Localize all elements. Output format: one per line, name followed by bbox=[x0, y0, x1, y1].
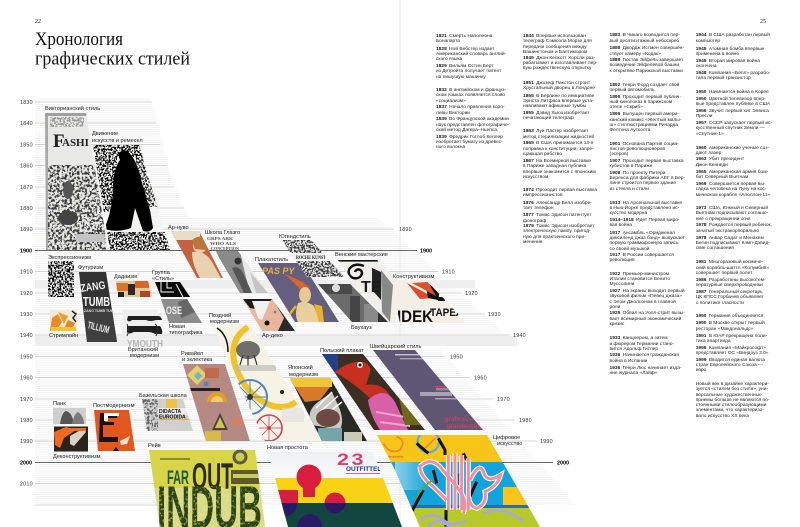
timeline grid lines bbox=[35, 102, 553, 505]
text column: 1844–1879 events: тает телефон bbox=[523, 206, 554, 211]
year labels: right ends of bands: 1950 bbox=[450, 354, 463, 360]
text column: 1844–1879 events: 1855 В Берлине по инициативе bbox=[523, 94, 594, 99]
text column: 1844–1879 events: телеграф Сэмюэла Морзе для bbox=[523, 39, 592, 44]
text column: 1944–1999 events and closing note: стран Европейского Союза — bbox=[696, 363, 763, 368]
style: Art Deco bbox=[242, 299, 296, 339]
year labels: left axis: 1830 bbox=[20, 100, 33, 106]
text column: 1844–1879 events: 1874 Проходит первая выставка bbox=[523, 188, 597, 193]
text column: 1883–1936 events: 1901 Основана Партия социа- bbox=[610, 142, 679, 147]
year labels: right ends of bands: 1930 bbox=[488, 312, 501, 318]
style: Late Modernism bbox=[209, 312, 325, 441]
text column: 1821–1839 events bbox=[436, 34, 510, 150]
text column: 1883–1936 events: 1908 По проекту Питера bbox=[610, 171, 666, 176]
year labels: left axis: 1840 bbox=[20, 121, 33, 127]
text column: 1944–1999 events and closing note: 1986 Разработаны высокотем- bbox=[696, 278, 766, 283]
text column: 1944–1999 events and closing note: зуется «стилем без стиля», уни- bbox=[696, 387, 768, 392]
text column: 1883–1936 events: 1883 В Чикаго возводится пер- bbox=[610, 33, 680, 38]
year labels: left axis: 1850 bbox=[20, 142, 33, 148]
year labels: left axis: 1990 bbox=[20, 439, 33, 445]
style: British Modernism bbox=[122, 310, 163, 359]
style: Futurism: Футуризм bbox=[78, 265, 103, 271]
text column: 1844–1879 events: 1876 Александр Белл изобре- bbox=[523, 201, 592, 206]
text column: 1844–1879 events: Эрнста Литфаса впервые уста- bbox=[523, 99, 594, 104]
text column: 1844–1879 events bbox=[523, 34, 598, 245]
text column: 1883–1936 events: первую граммофонную запись bbox=[610, 241, 679, 246]
style: Victorian: Викторианский стиль bbox=[45, 105, 100, 112]
text column: 1883–1936 events: первый автомобиль bbox=[610, 88, 654, 93]
text column: 1821–1839 events: изобретает бумагу из древес- bbox=[436, 140, 503, 145]
text column: 1944–1999 events and closing note: окончена bbox=[696, 64, 717, 69]
style: Swiss Style bbox=[370, 343, 487, 430]
text column: 1944–1999 events and closing note: ский корабль-шаттл «Колумбия» bbox=[696, 266, 769, 271]
style: Vienna Secession bbox=[335, 252, 401, 322]
style: Digital Art: искусство bbox=[497, 441, 522, 447]
text column: 1944–1999 events and closing note: 1948 Компания «Белл» разрабо- bbox=[696, 71, 770, 76]
style: Expressionism: Экспрессионизм bbox=[48, 255, 91, 261]
style: Digital Art: Цифровое bbox=[493, 435, 520, 441]
text column: 1883–1936 events: звуковой фильм «Певец джаза» bbox=[610, 294, 682, 299]
text column: 1944–1999 events and closing note: 1995 Компания «Майкрософт» bbox=[696, 346, 766, 351]
year labels: right ends of bands: 1890 bbox=[399, 227, 412, 233]
text column: 1821–1839 events: 1828 Ной Вебстер издает bbox=[436, 47, 494, 52]
style: Basel School: DIDACTA bbox=[159, 409, 182, 415]
style: Glasgow School: GRPS ARK bbox=[207, 236, 234, 241]
text column: 1883–1936 events: листов-революционеров bbox=[610, 147, 665, 152]
style: New Typography: Новая bbox=[169, 324, 185, 330]
style: De Stijl group bbox=[152, 270, 191, 297]
style: New Typography: OSE bbox=[166, 305, 182, 317]
style: Art Deco: Ар-деко bbox=[262, 333, 283, 339]
style: British Modernism: модернизм bbox=[130, 353, 159, 359]
text column: 1844–1879 events: Хрустальный дворец в Лондоне bbox=[523, 86, 595, 91]
text column: 1883–1936 events: с Элом Джолсоном в главной bbox=[610, 300, 676, 305]
style: Arts and Crafts: искусств и ремесел bbox=[92, 138, 143, 144]
text column: 1944–1999 events and closing note: вало искусство XX века bbox=[696, 414, 749, 419]
text column: 1883–1936 events: к открытию Парижской выставки bbox=[610, 69, 683, 74]
text column: 1944–1999 events and closing note: Джон Кеннеди bbox=[696, 163, 728, 168]
style: Late Modernism: Поздний bbox=[209, 312, 231, 319]
style: Victorian: ASHI bbox=[62, 137, 89, 149]
text column: 1944–1999 events and closing note: 1987 Генеральный секретарь bbox=[696, 290, 763, 295]
text column: 1883–1936 events: 1917 Ансамбль «Оридженал bbox=[610, 231, 675, 236]
text column: 1883–1936 events: лине строится первое здание bbox=[610, 181, 676, 186]
text column: 1883–1936 events: из стекла и стали bbox=[610, 187, 649, 192]
text column: 1883–1936 events: 1907 Проходит первая выставка bbox=[610, 159, 684, 164]
text column: 1883–1936 events: 1936 Генри Люс начинает изда- bbox=[610, 366, 682, 371]
title: графических стилей bbox=[35, 50, 190, 70]
style: Swiss Style: graficas — bbox=[445, 417, 476, 423]
text column: 1844–1879 events: щающая рабство bbox=[523, 152, 562, 157]
style: New Simplicity: Новая простота bbox=[267, 445, 309, 451]
style: Streamline: Стримлайн bbox=[49, 332, 78, 339]
text column: 1883–1936 events: 1913 На Арсенальной выставке bbox=[610, 201, 682, 206]
year labels: left axis: 2000 bbox=[20, 460, 32, 466]
text column: 1883–1936 events: вый десятиэтажный небоскреб bbox=[610, 39, 679, 44]
text column: 1844–1879 events: передачи сообщения между bbox=[523, 45, 587, 50]
text column: 1883–1936 events: вая война bbox=[610, 223, 632, 228]
year labels: left axis: 1900 bbox=[20, 248, 32, 254]
text column: 1821–1839 events: 1837 Начало правления коро- bbox=[436, 105, 505, 110]
year labels: left axis: 1880 bbox=[20, 206, 33, 212]
style: New Typography bbox=[160, 299, 204, 336]
text column: 1844–1879 events: 1879 Томас Эдисон изобретает bbox=[523, 224, 594, 229]
text column: 1844–1879 events: Вашингтоном и Балтимором bbox=[523, 50, 587, 55]
text column: 1944–1999 events and closing note: совершает первый полет bbox=[696, 271, 752, 276]
style: Plakatstil: PAS PY bbox=[262, 266, 295, 276]
text column: 1883–1936 events: Муссолини bbox=[610, 282, 634, 287]
title bbox=[35, 30, 190, 70]
text column: 1883–1936 events: Беренса для фабрики АЕГ в Бер- bbox=[610, 176, 685, 181]
style: Streamline bbox=[49, 310, 78, 339]
style: Revival and Eclectic: и эклектика bbox=[182, 357, 213, 363]
text column: 1821–1839 events: 1839 Фредрик Готлоб Келлер bbox=[436, 135, 503, 140]
text column: 1944–1999 events and closing note: Новый век в дизайне характери- bbox=[696, 382, 769, 387]
text column: 1883–1936 events: 1927 На экраны выходит первый bbox=[610, 289, 685, 294]
style: Constructivism bbox=[392, 274, 466, 326]
text column: 1883–1936 events: 1896 Выпущен первый амери- bbox=[610, 112, 679, 117]
text column: 1844–1879 events: 1855 Дэвид Хьюз изобретает bbox=[523, 111, 589, 116]
style: Jugendstil: Югендстиль bbox=[279, 234, 311, 240]
style: Plakatstil bbox=[255, 257, 345, 322]
style: Art Nouveau bbox=[168, 225, 225, 278]
text column: 1821–1839 events: на пишущую машинку bbox=[436, 75, 486, 80]
year labels: left axis: 1950 bbox=[20, 354, 33, 360]
text column: 1883–1936 events: Фелтона Аутколта bbox=[610, 128, 650, 133]
style: Swiss Style: grandeslibros bbox=[447, 424, 487, 430]
text column: 1883–1936 events: отеле «Скриб» bbox=[610, 105, 643, 110]
text column: 1844–1879 events: 1867 На Всемирной выставке bbox=[523, 159, 591, 164]
year labels: left axis: 1980 bbox=[20, 418, 33, 424]
style: Japanese Modernism: Японский bbox=[288, 364, 313, 371]
title: Хронология bbox=[35, 30, 123, 50]
style: Bauhaus bbox=[316, 284, 390, 331]
style: Arts and Crafts bbox=[90, 131, 175, 250]
text column: 1944–1999 events and closing note: 1957 СССР запускает первый ис- bbox=[696, 121, 772, 126]
style: Victorian: F bbox=[53, 131, 65, 152]
style: Expressionism bbox=[48, 255, 91, 297]
text column: 1883–1936 events: кусство модерна bbox=[610, 211, 647, 216]
style: Rave: FAR bbox=[167, 468, 189, 489]
text column: 1944–1999 events and closing note: 1945 Вторая мировая война bbox=[696, 59, 760, 64]
text column: 1883–1936 events: ш» с иллюстрациями Ричарда bbox=[610, 123, 678, 128]
text column: 1883–1936 events: ный кинопоказ в парижском bbox=[610, 100, 672, 105]
text column: 1844–1879 events: рабатывает и изготавливает пер- bbox=[523, 61, 598, 66]
text column: 1883–1936 events: война в Испании bbox=[610, 359, 647, 364]
text column: 1821–1839 events: ского языка bbox=[436, 57, 462, 62]
page number left: 22 bbox=[35, 19, 41, 25]
style: Jugendstil bbox=[279, 234, 346, 277]
text column: 1844–1879 events: вую рождественскую открытку bbox=[523, 66, 591, 71]
text column: 1844–1879 events: в Париже западная публика bbox=[523, 164, 586, 169]
style: Revival and Eclectic bbox=[181, 350, 252, 441]
style: Dadaism: Дадаизм bbox=[114, 274, 137, 280]
year labels: left axis: 2010 bbox=[20, 482, 33, 488]
text column: 1944–1999 events and closing note: тала первый транзистор bbox=[696, 76, 751, 81]
text column: 1844–1879 events: 1865 В США принимается 13-я bbox=[523, 141, 593, 146]
text column: 1883–1936 events bbox=[610, 33, 685, 376]
text column: 1821–1839 events: 1832 В английском и француз- bbox=[436, 88, 506, 93]
text column: 1944–1999 events and closing note: Бегин подписывают Кэмп-Дэвид- bbox=[696, 241, 770, 246]
year labels: right ends of bands: 2000 bbox=[557, 460, 569, 466]
year labels: left axis: 1860 bbox=[20, 164, 33, 170]
text column: 1944–1999 events and closing note: ние о прекращении огня bbox=[696, 217, 750, 222]
text column: 1944–1999 events and closing note: 1945 Атомная бомба впервые bbox=[696, 47, 764, 52]
style: New Simplicity: OUTFITTED bbox=[346, 467, 383, 473]
text column: 1844–1879 events: 1863 Луи Пастер изобретает bbox=[523, 129, 589, 134]
text column: 1944–1999 events and closing note: представляет ОС «Виндоуз 3.0» bbox=[696, 351, 769, 356]
year labels: right ends of bands: 1920 bbox=[465, 291, 478, 297]
text column: 1844–1879 events: навливают афишные тумбы bbox=[523, 104, 586, 109]
style: Futurism: TUMB bbox=[83, 294, 110, 309]
style: Dadaism bbox=[114, 274, 153, 297]
style: Polish Poster bbox=[320, 347, 428, 430]
text column: 1844–1879 events: электрическую лампу, пригод- bbox=[523, 229, 591, 234]
text column: 1821–1839 events: наук представлен фотографиче- bbox=[436, 123, 509, 128]
year labels: left axis: 1970 bbox=[20, 397, 33, 403]
year labels: right ends of bands: 1900 bbox=[420, 248, 432, 254]
style: Rave: OUT bbox=[192, 456, 233, 497]
style: Postmodernism: Постмодернизм bbox=[93, 403, 135, 409]
text column: 1821–1839 events: Американский словарь англий- bbox=[436, 52, 506, 57]
text column: 1883–1936 events: 1888 Джордж Истмен совершен- bbox=[610, 46, 684, 51]
text column: 1944–1999 events and closing note: Пресли bbox=[696, 114, 713, 119]
text column: 1944–1999 events and closing note: 1944 В США разработан первый bbox=[696, 33, 770, 38]
year labels: left axis: 1910 bbox=[20, 270, 33, 276]
year labels: left axis: 1890 bbox=[20, 227, 33, 233]
text column: 1883–1936 events: 1892 Генри Форд создает свой bbox=[610, 83, 679, 88]
text column: 1844–1879 events: 1851 Джозеф Пакстон строит bbox=[523, 81, 590, 86]
text column: 1844–1879 events: 1877 Томас Эдисон патентует bbox=[523, 213, 591, 218]
style: Futurism bbox=[78, 265, 120, 342]
style: Constructivism: Конструктивизм bbox=[393, 274, 435, 280]
text column: 1821–1839 events: левы Виктории bbox=[436, 111, 470, 116]
style: Vienna Secession: TE bbox=[361, 279, 382, 296]
style: Glasgow School bbox=[205, 230, 272, 293]
year labels: left axis: 1960 bbox=[20, 376, 33, 382]
style: Constructivism: ТАРЕЛ bbox=[430, 307, 463, 319]
style: Futurism: TILLIUM bbox=[86, 320, 110, 336]
text column: 1821–1839 events: 1821 Смерть Наполеона bbox=[436, 34, 492, 39]
text column: 1944–1999 events and closing note: 1990 Германия объединяется bbox=[696, 314, 763, 319]
text column: 1883–1936 events: диксиленд джаз бэнд» выпускает bbox=[610, 236, 685, 241]
text column: 1821–1839 events: Бонапарта bbox=[436, 39, 460, 44]
text column: 1883–1936 events: 1936 Начинается гражданская bbox=[610, 353, 679, 358]
style: British Modernism: YMOUTH bbox=[127, 339, 163, 350]
text column: 1883–1936 events: возведение Эйфелевой башни bbox=[610, 63, 679, 68]
text column: 1944–1999 events and closing note: тика апартеида bbox=[696, 339, 731, 344]
text column: 1821–1839 events: из Детройта получает патент bbox=[436, 69, 501, 74]
style: Art Nouveau: Ар-нуво bbox=[168, 225, 189, 231]
style: Rave bbox=[148, 442, 268, 527]
text column: 1883–1936 events: революция bbox=[610, 258, 635, 263]
text column: 1944–1999 events and closing note: 1991 В ЮАР прекращена поли- bbox=[696, 334, 767, 339]
style: Constructivism: IDEK bbox=[397, 307, 434, 326]
style: Futurism: ZANG bbox=[80, 280, 106, 295]
style: New Typography: типографика bbox=[169, 330, 203, 336]
text column: 1844–1879 events: импрессионистов bbox=[523, 193, 563, 198]
text column: 1883–1936 events: ствует камеру «Кодак» bbox=[610, 52, 661, 57]
style: New Simplicity bbox=[266, 445, 404, 527]
text column: 1944–1999 events and closing note: бит Северный Вьетнам bbox=[696, 175, 748, 180]
style: Victorian bbox=[45, 105, 110, 250]
text column: 1944–1999 events and closing note: садка человека на Луну на кос- bbox=[696, 187, 766, 192]
text column: 1944–1999 events and closing note: 1973 США, Южный и Северный bbox=[696, 206, 768, 211]
style: Glasgow School: WHO ALS bbox=[210, 241, 237, 246]
style: Punk: Панк bbox=[53, 401, 66, 407]
text column: 1944–1999 events and closing note: зачатый экстракорпорально bbox=[696, 229, 759, 234]
text column: 1844–1879 events: фонограф bbox=[523, 219, 546, 224]
style: Revival and Eclectic: Ривайвл bbox=[181, 350, 203, 357]
text column: 1883–1936 events: и фюрером Германии стано- bbox=[610, 342, 674, 347]
style: Glasgow School: CONCEPTION bbox=[211, 246, 240, 251]
year labels: right ends of bands: 1940 bbox=[513, 333, 526, 339]
text column: 1844–1879 events: печатающий телеграф bbox=[523, 116, 574, 121]
text column: 1883–1936 events: канский комикс «Желтый малы- bbox=[610, 118, 681, 123]
text column: 1944–1999 events and closing note: пературные сверхпроводники bbox=[696, 283, 763, 288]
style: Late Modernism: модернизм bbox=[210, 319, 239, 325]
text column: 1883–1936 events: 1889 Гюстав Эйфель завершает bbox=[610, 58, 683, 63]
text column: 1821–1839 events: ский метод Дагера–Ньепса. bbox=[436, 128, 498, 133]
style: New Simplicity: 23 bbox=[337, 450, 366, 469]
style: De Stijl group: «Стиль» bbox=[152, 276, 174, 282]
text column: 1844–1879 events: искусством bbox=[523, 175, 548, 180]
text column: 1944–1999 events and closing note: евро bbox=[696, 368, 706, 373]
year labels: right ends of bands bbox=[399, 227, 569, 466]
text column: 1944–1999 events and closing note: кусственный спутник Земли — bbox=[696, 126, 765, 131]
text column: 1944–1999 events and closing note: 1965 Американская армия бом- bbox=[696, 170, 768, 175]
text column: 1844–1879 events: ную для практического при- bbox=[523, 235, 586, 240]
text column: 1821–1839 events: 1839 Во Французской академии bbox=[436, 117, 509, 122]
style: Japanese Modernism: модернизм bbox=[289, 372, 318, 378]
text column: 1883–1936 events: в Нью-Йорке представлено ис- bbox=[610, 206, 679, 211]
style: Plakatstil: Плакатстиль bbox=[255, 257, 288, 263]
text column: 1944–1999 events and closing note: о политике гласности bbox=[696, 301, 744, 306]
style: Arts and Crafts: Движение bbox=[92, 131, 118, 137]
text column: 1944–1999 events and closing note: 1981 Многоразовый космиче- bbox=[696, 260, 763, 265]
text column: 1883–1936 events: ние журнала «Лайф» bbox=[610, 371, 657, 376]
year labels: right ends of bands: 1970 bbox=[497, 397, 510, 403]
text column: 1883–1936 events: 1922 Премьер-министром bbox=[610, 272, 669, 277]
text column: 1944–1999 events and closing note bbox=[696, 32, 772, 419]
style: De Stijl group: Группа bbox=[152, 270, 171, 276]
year labels: left axis: 1870 bbox=[20, 185, 33, 191]
style: Glasgow School: Школа Глазго bbox=[205, 230, 240, 236]
style: Basel School: Базельская школа bbox=[139, 393, 188, 399]
text column: 1821–1839 events: ском языках появляется слово bbox=[436, 93, 505, 98]
text column: 1883–1936 events: Италии становится Бенито bbox=[610, 277, 670, 282]
style: Rave: Рейв bbox=[148, 442, 161, 449]
text column: 1944–1999 events and closing note: 1969 Совершается первая вы- bbox=[696, 182, 765, 187]
text column: 1883–1936 events: 1933 Канцлером, а затем bbox=[610, 336, 668, 341]
style: Bauhaus: Баухауз bbox=[351, 325, 372, 331]
text column: 1944–1999 events and closing note: мическом корабле «Аполлон-11» bbox=[696, 193, 770, 198]
style: Basel School: EURODIDA bbox=[159, 414, 186, 420]
year labels: left axis: 1930 bbox=[20, 312, 33, 318]
style: Deconstructivism: Деконструктивизм bbox=[53, 454, 101, 460]
text column: 1944–1999 events and closing note: ЦК КПСС Горбачев объявляет bbox=[696, 295, 764, 300]
text column: 1821–1839 events: «социализм» bbox=[436, 99, 466, 104]
text column: 1944–1999 events and closing note: 1978 Анвар Садат и Менахем bbox=[696, 236, 764, 241]
text column: 1944–1999 events and closing note: Вьетнам подписывают соглаше- bbox=[696, 211, 768, 216]
text column: 1883–1936 events: кризис bbox=[610, 322, 624, 327]
text column: 1944–1999 events and closing note: дают лазер bbox=[696, 151, 721, 156]
text column: 1944–1999 events and closing note: 1978 Рождается первый ребенок, bbox=[696, 223, 772, 228]
year labels: left axis: 1940 bbox=[20, 333, 33, 339]
style: Deconstructivism bbox=[53, 426, 101, 460]
style: Digital Art bbox=[375, 431, 545, 527]
year labels: right ends of bands: 1960 bbox=[474, 376, 487, 382]
style: Vienna Secession: Венские мастерские bbox=[335, 252, 388, 258]
text column: 1883–1936 events: 1929 Обвал на Уолл-стрит вызы- bbox=[610, 311, 685, 316]
text column: 1883–1936 events: вится Адольф Гитлер bbox=[610, 347, 658, 352]
text column: 1944–1999 events and closing note: ские соглашения bbox=[696, 246, 734, 251]
text column: 1883–1936 events: вает всемирный экономический bbox=[610, 317, 681, 322]
style: Jugendstil: ROCHE KUNST bbox=[296, 256, 327, 261]
text column: 1844–1879 events: менения bbox=[523, 240, 542, 245]
style: Japanese Modernism bbox=[288, 364, 368, 441]
text column: 1883–1936 events: 1914–1918 Идет Первая миро- bbox=[610, 218, 680, 223]
text column: 1944–1999 events and closing note: 1999 Вводится единая валюта bbox=[696, 358, 765, 363]
text column: 1821–1839 events: 1829 Вильям Остин Берт bbox=[436, 64, 494, 69]
text column: 1944–1999 events and closing note: ресторан «Макдональдс» bbox=[696, 327, 754, 332]
year labels: right ends of bands: 1980 bbox=[519, 418, 532, 424]
text column: 1844–1879 events: 1845 Джон Келкотт Хорсли раз- bbox=[523, 56, 595, 61]
text column: 1944–1999 events and closing note: стоянными стилеобразующими bbox=[696, 403, 766, 408]
style: Swiss Style: Швейцарский стиль bbox=[370, 343, 421, 350]
background stripes: timeline bands bbox=[35, 0, 575, 527]
page number right: 25 bbox=[760, 19, 766, 25]
text column: 1883–1936 events: роли bbox=[610, 305, 620, 310]
year labels: left axis bbox=[20, 100, 33, 488]
text column: 1844–1879 events: впервые знакомится с японским bbox=[523, 170, 596, 175]
text column: 1883–1936 events: со своей музыкой bbox=[610, 247, 649, 252]
text column: 1821–1839 events: ного волокна bbox=[436, 145, 465, 150]
text column: 1944–1999 events and closing note: 1956 Звучит первый хит Элвиса bbox=[696, 109, 769, 114]
style: Polish Poster: Польский плакат bbox=[320, 347, 364, 354]
style: Punk bbox=[53, 401, 86, 424]
text column: 1944–1999 events and closing note: вые представлен публике в США bbox=[696, 102, 770, 107]
text column: 1844–1879 events: поправка к конституции, запре- bbox=[523, 147, 594, 152]
text column: 1944–1999 events and closing note: 1960 Американские ученые соз- bbox=[696, 146, 769, 151]
year labels: left axis: 1920 bbox=[20, 291, 33, 297]
text column: 1883–1936 events: 1895 Проходит первый публич- bbox=[610, 95, 681, 100]
style: Postmodernism bbox=[92, 403, 138, 451]
text column: 1944–1999 events and closing note: приемы больше не являются по- bbox=[696, 398, 769, 403]
text column: 1844–1879 events: метод стерилизации жидкостей bbox=[523, 135, 594, 140]
text column: 1883–1936 events: 1917 В России совершается bbox=[610, 253, 674, 258]
text column: 1944–1999 events and closing note: 1950 Цветной телевизор впер- bbox=[696, 97, 766, 102]
text column: 1883–1936 events: (эсеров) bbox=[610, 152, 628, 157]
year labels: right ends of bands: 1990 bbox=[540, 439, 553, 445]
style: Basel School bbox=[139, 393, 195, 431]
text column: 1944–1999 events and closing note: элементами, что характеризо- bbox=[696, 408, 764, 413]
text column: 1883–1936 events: кубистов в Париже bbox=[610, 164, 652, 169]
text column: 1944–1999 events and closing note: 1963 Убит президент bbox=[696, 157, 744, 162]
year labels: right ends of bands: 1910 bbox=[442, 270, 455, 276]
text column: 1944–1999 events and closing note: версальные художественные bbox=[696, 393, 762, 398]
text column: 1944–1999 events and closing note: компьютер bbox=[696, 39, 720, 44]
style: Futurism: ZANG TUMB TUMB bbox=[84, 309, 117, 313]
text column: 1944–1999 events and closing note: 1990 В Москве открыт первый bbox=[696, 321, 765, 326]
text column: 1844–1879 events: 1844 Впервые использован bbox=[523, 34, 586, 39]
text column: 1944–1999 events and closing note: применена в войне bbox=[696, 52, 739, 57]
text column: 1944–1999 events and closing note: «Спутник-1» bbox=[696, 132, 724, 137]
text column: 1944–1999 events and closing note: 1950 Начинается война в Корее bbox=[696, 90, 769, 95]
style: British Modernism: Британский bbox=[128, 346, 158, 353]
